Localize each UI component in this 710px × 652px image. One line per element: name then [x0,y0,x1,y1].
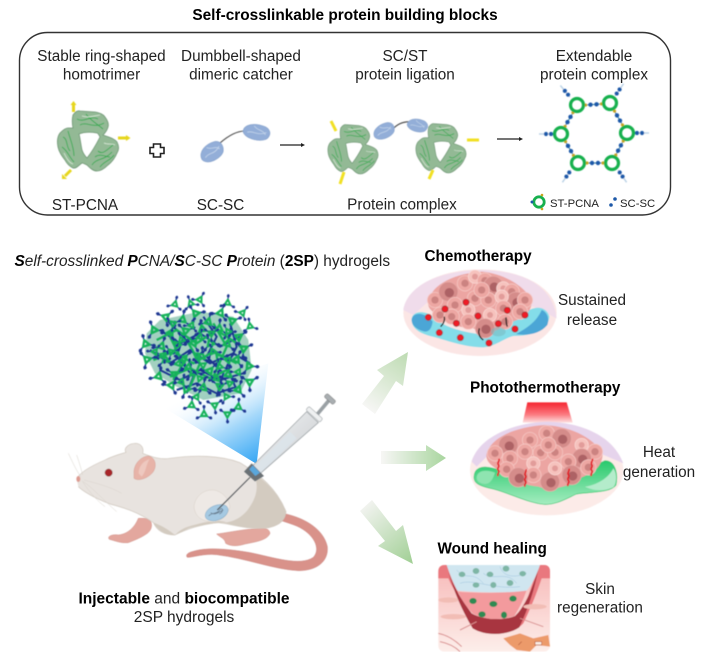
tissue [403,269,557,356]
heading: chemotherapy: Chemotherapy [424,248,532,265]
hydrogel network [139,288,263,424]
icon: SC-SC dumbbell [198,120,272,164]
skin block [438,565,550,652]
label: extendable protein complex: Extendable [556,48,632,65]
arrow: to extendable complex [497,137,523,141]
label: heat generation: Heat [643,444,675,461]
mouse tail [187,513,327,571]
label: dumbbell-shaped dimeric catcher: dimeric catcher [189,67,293,84]
syringe [217,393,336,510]
label: injectable and biocompatible: Injectable and biocompatible [78,590,290,608]
panel: building blocks [20,32,670,215]
label: heat generation: generation [623,464,695,481]
illustration: chemotherapy tumor [403,269,557,356]
arrow: to wound healing [360,500,413,564]
tumor cells [486,425,603,491]
hydrogel [447,565,540,592]
tissue [470,425,623,515]
fibroblast cluster [503,633,550,652]
hydrogel particles [459,566,526,588]
label: dumbbell-shaped dimeric catcher: Dumbbell-shaped [181,48,301,65]
light beam [165,363,268,464]
label: sustained release: Sustained [558,292,626,309]
heading: 2SP hydrogels: Self-crosslinked PCNA/SC-SC Protein (2SP) hydrogels [14,253,390,270]
illustration: skin wound [438,565,550,652]
icon: plus [150,144,164,157]
drug particles [425,299,528,346]
heat squiggles [498,459,593,487]
hydrogel depot [474,461,617,504]
laser beam [523,402,573,423]
legend: ST-PCNA and SC-SC [530,194,655,210]
heading: photothermotherapy: Photothermotherapy [470,380,621,396]
label: skin regeneration: regeneration [557,600,643,616]
arrow: to photothermotherapy [381,445,446,471]
legend: ST-PCNA and SC-SC: SC-SC [620,198,655,210]
icon: ST-PCNA trimer [57,101,130,179]
arrow: to ligation [280,143,305,147]
icon: hexagonal protein complex [539,83,649,183]
label: SC/ST protein ligation: SC/ST [382,48,428,65]
healing tissue [458,590,527,619]
label: SC-SC: SC-SC [197,197,244,214]
tumor cells [427,270,533,338]
label: sustained release: release [567,312,617,329]
illustration: photothermal tumor [470,402,623,515]
label: injectable and biocompatible: 2SP hydrogels [134,609,235,626]
illustration: mouse with syringe and hydrogel [68,288,336,571]
legend: ST-PCNA and SC-SC: ST-PCNA [550,198,599,210]
label: SC/ST protein ligation: protein ligation [355,67,455,84]
title: protein building blocks: Self-crosslinkable protein building blocks [192,7,498,24]
fibroblasts [438,597,547,619]
icon: protein complex [328,115,479,184]
migrating cells [469,596,517,618]
heading: wound healing: Wound healing [438,540,547,558]
label: ST-PCNA: ST-PCNA [52,197,119,214]
arrow: to chemotherapy [362,352,408,414]
drug release paths [441,317,507,340]
dermis layer [448,568,538,634]
hydrogel depot [412,308,549,347]
label: protein complex: Protein complex [347,196,457,214]
label: skin regeneration: Skin [585,581,615,598]
label: extendable protein complex: protein complex [540,67,648,84]
label: stable ring-shaped homotrimer: homotrimer [63,67,140,84]
mouse feet [109,518,270,546]
mouse body [68,443,286,535]
label: stable ring-shaped homotrimer: Stable ring-shaped [37,48,166,65]
